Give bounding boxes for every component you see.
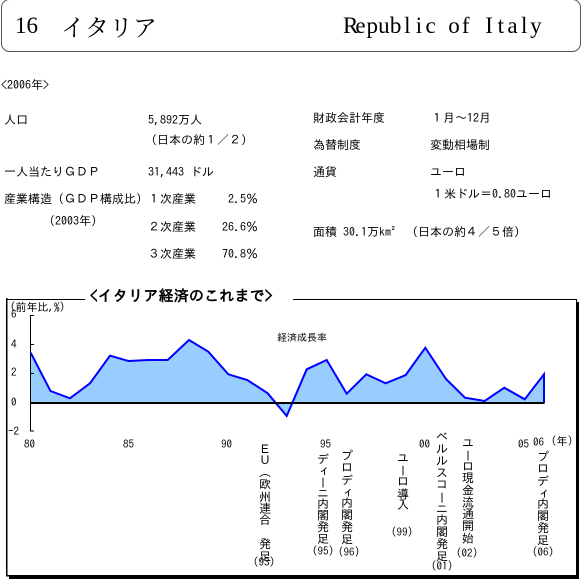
industry year: (2003年)	[49, 215, 97, 227]
currency label: 通貨	[313, 166, 337, 178]
x axis labels: (年)	[551, 436, 573, 447]
x axis labels: 80	[24, 439, 35, 450]
title japanese: イタリア	[61, 8, 157, 43]
title english: p	[366, 13, 378, 38]
year label: <2006年>	[1, 79, 49, 91]
title english: a	[507, 13, 518, 38]
title english: f	[462, 13, 470, 38]
title english: R	[343, 13, 358, 38]
x axis labels: 05	[518, 439, 529, 450]
y axis unit: (前年比,%)	[10, 302, 65, 313]
population: 人口	[4, 114, 28, 126]
tertiary share: 70.8％	[222, 248, 258, 260]
event: euro introduction: ユーロ導入	[397, 451, 409, 511]
event year 96: (96)	[338, 547, 360, 558]
event: Berlusconi cabinet: ベルルスコーニ内閣発足	[436, 430, 448, 562]
event: Prodi cabinet 2006: プロディ内閣発足	[537, 450, 549, 546]
x axis labels: 85	[123, 439, 134, 450]
exchange regime value: 変動相場制	[430, 139, 490, 151]
area: 面積 30.1万km² （日本の約４／５倍）	[313, 226, 526, 238]
tertiary industry: ３次産業	[148, 248, 196, 260]
event year 95: (95)	[312, 546, 334, 557]
y axis label -2: -2	[8, 426, 19, 437]
y axis label 4: 4	[11, 339, 16, 350]
title english: I	[485, 13, 493, 38]
primary industry: １次産業	[148, 193, 196, 205]
secondary share: 26.6％	[222, 221, 258, 233]
title english: l	[521, 13, 527, 38]
panel: left statistics	[4, 114, 258, 260]
event year 01: (01)	[431, 561, 453, 572]
title english	[343, 13, 542, 38]
series label: 経済成長率	[277, 333, 327, 343]
event: Dini cabinet: ディーニ内閣発足	[317, 452, 329, 544]
panel: right statistics	[313, 112, 552, 238]
y axis label 2: 2	[11, 367, 16, 378]
title english: t	[498, 13, 504, 38]
exchange rate: １米ドル＝0.80ユーロ	[432, 188, 552, 200]
title english: i	[416, 13, 422, 38]
title english: c	[426, 13, 436, 38]
title english: b	[390, 13, 401, 38]
event year 06: (06)	[532, 547, 554, 558]
GDP per capita value: 31,443 ドル	[148, 166, 214, 178]
y axis label 0: 0	[11, 397, 16, 408]
industry structure label: 産業構造（ＧＤＰ構成比）	[4, 193, 148, 205]
event: EU founded: ＥＵ（欧州連合 発足	[259, 442, 271, 562]
title english: l	[404, 13, 410, 38]
event: Prodi cabinet: プロディ内閣発足	[341, 449, 353, 545]
growth line	[31, 340, 544, 416]
panel: economy history frame	[6, 298, 579, 579]
header box	[1, 0, 581, 52]
y axis	[30, 315, 34, 432]
title english: u	[378, 13, 390, 38]
event year 93: (93)	[253, 557, 275, 568]
title number: 16	[15, 13, 38, 38]
fiscal year label: 財政会計年度	[313, 112, 385, 124]
x axis labels: 95	[320, 439, 331, 450]
currency value: ユーロ	[430, 166, 466, 178]
event year 99: (99)	[391, 527, 413, 538]
y axis label 6: 6	[11, 309, 16, 320]
x axis labels: 00	[419, 439, 430, 450]
population value: 5,892万人	[148, 114, 202, 126]
event: euro cash: ユーロ現金流通開始	[462, 436, 474, 544]
x axis labels	[24, 436, 573, 450]
population comparison: （日本の約１／２）	[145, 134, 253, 146]
x axis labels: 90	[221, 439, 232, 450]
secondary industry: ２次産業	[148, 221, 196, 233]
x axis labels: 06	[533, 437, 544, 448]
primary share: 2.5％	[228, 193, 258, 205]
section heading: <イタリア経済のこれまで>	[90, 288, 273, 303]
title english: e	[355, 13, 366, 38]
event year 02: (02)	[456, 548, 478, 559]
exchange regime label: 為替制度	[313, 139, 361, 151]
area fill	[31, 340, 544, 416]
zero baseline	[30, 402, 544, 404]
title english: o	[448, 13, 460, 38]
GDP per capita label: 一人当たりＧＤＰ	[4, 166, 100, 178]
fiscal year value: １月～12月	[431, 112, 491, 124]
title english: y	[530, 13, 542, 38]
